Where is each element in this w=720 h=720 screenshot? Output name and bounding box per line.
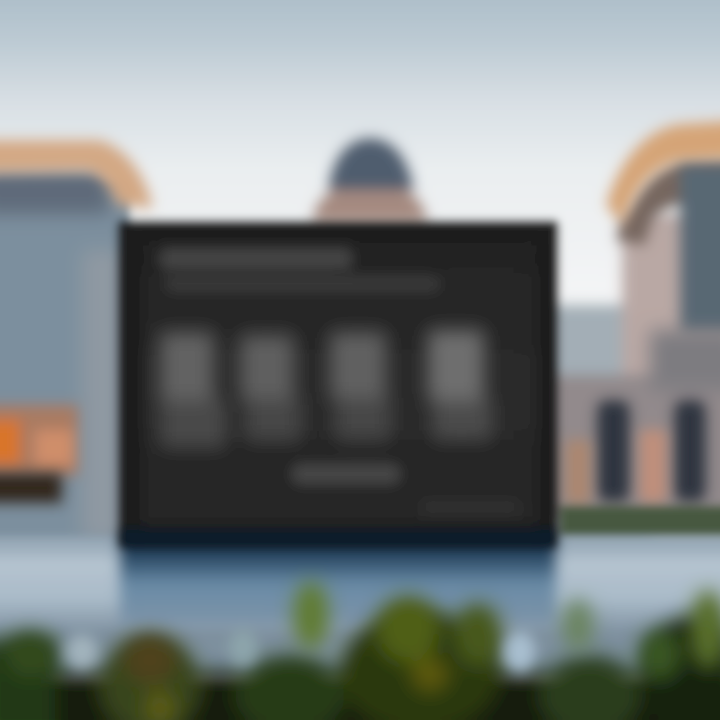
right lower door 1 [597, 400, 630, 502]
right building eave shadow [616, 160, 720, 245]
right grey upper band [650, 330, 720, 390]
column 4 [428, 330, 492, 440]
column 2 [240, 335, 301, 441]
left building dark base [0, 473, 62, 503]
subheading line [165, 276, 440, 292]
right wing [540, 305, 652, 540]
right building orange roof [606, 120, 720, 225]
column 1 [160, 332, 226, 448]
column 3 [330, 332, 391, 440]
foliage tips [4, 581, 720, 720]
board inner surface [142, 240, 538, 524]
sky gaps through foliage [67, 630, 535, 672]
left building orange roof [0, 140, 153, 208]
right building [540, 120, 720, 540]
right building wall [622, 215, 720, 395]
footer line [420, 500, 520, 514]
right grass strip [560, 506, 720, 538]
central domed building [312, 138, 428, 222]
right building lower stone [545, 375, 720, 520]
right lower door 2 [674, 400, 706, 502]
board frame [118, 221, 558, 546]
left building lit column [82, 250, 122, 540]
left building body [0, 180, 130, 542]
left building [0, 140, 153, 542]
foliage base [0, 612, 720, 720]
right warm column 1 [566, 440, 590, 504]
plaza ground [0, 536, 720, 676]
reflecting water under board [120, 535, 556, 625]
left building orange storefront [0, 405, 78, 475]
right warm column 2 [640, 430, 666, 502]
heading [160, 248, 352, 270]
board lower navy edge [120, 528, 556, 548]
left building shadowed frieze [0, 168, 110, 214]
foreground foliage [0, 581, 720, 720]
panel: black board [118, 221, 558, 548]
right building dark glass [680, 165, 720, 333]
caption [292, 464, 400, 484]
